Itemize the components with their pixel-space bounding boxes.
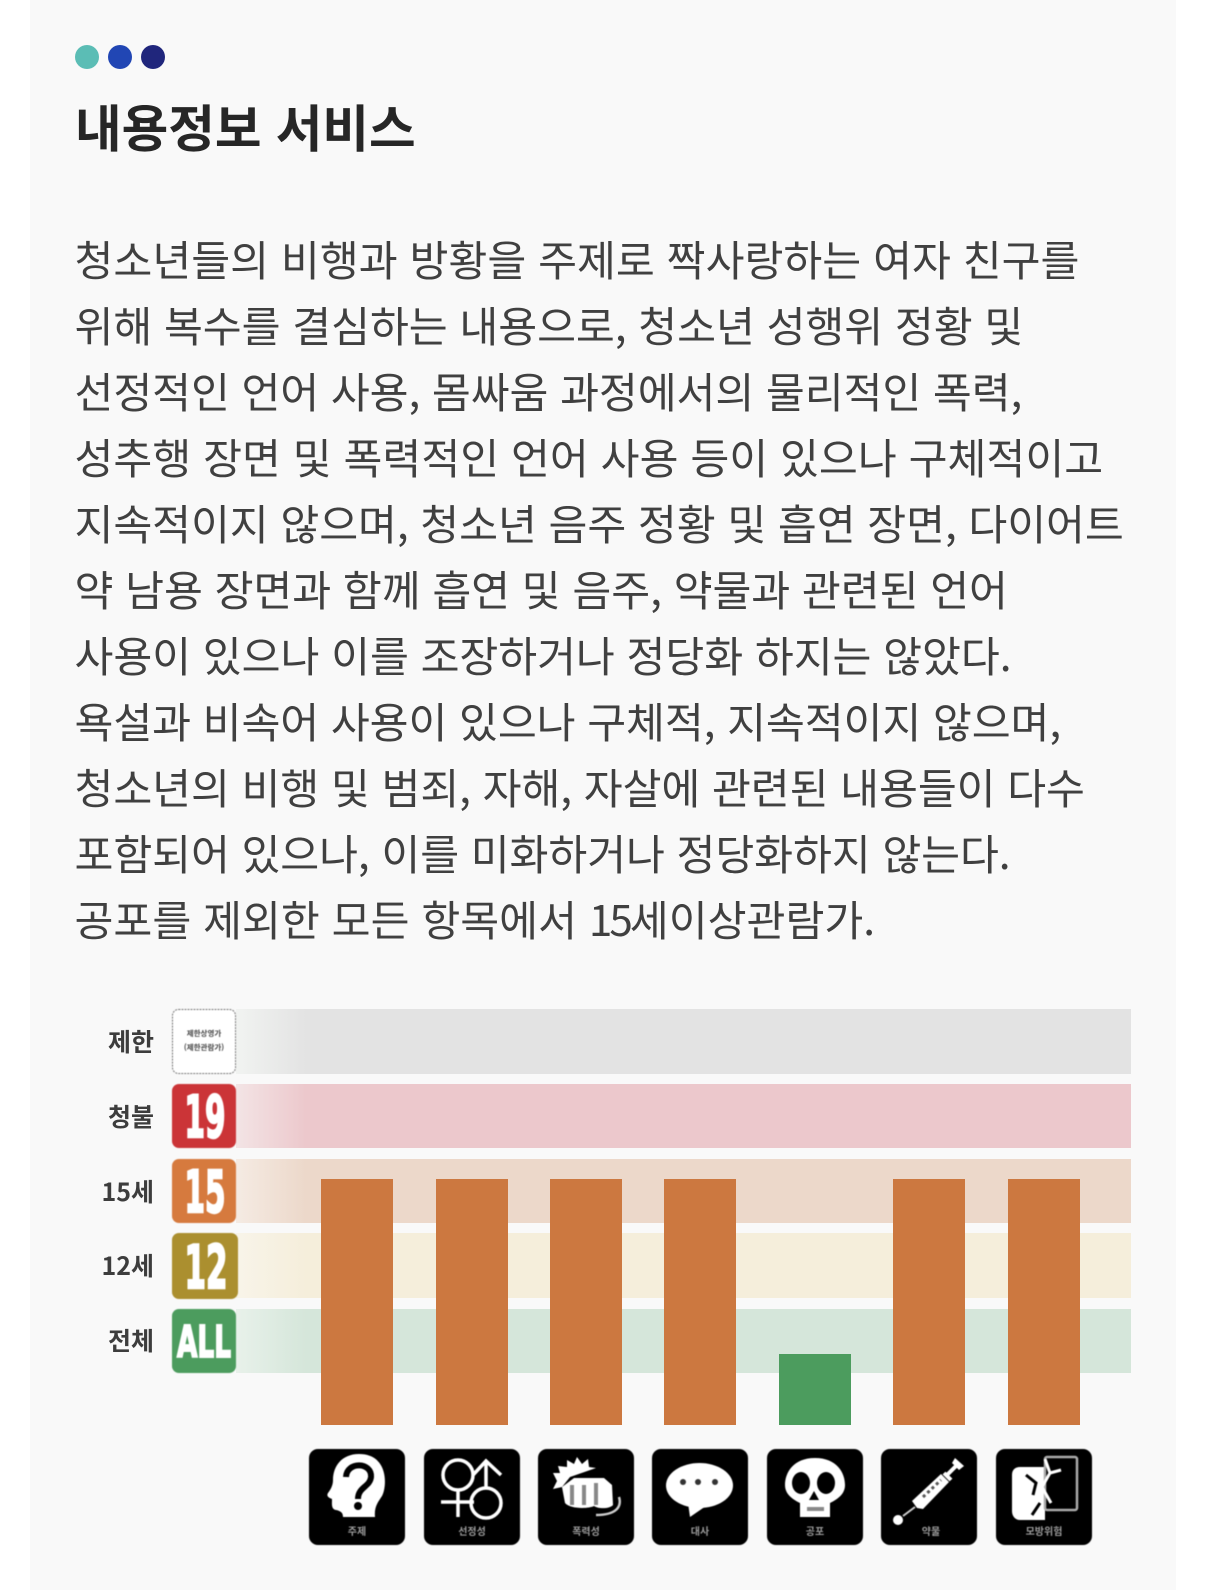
icon: imitation risk: 모방위험 [1026,1523,1062,1538]
row band: 19 [236,1084,1131,1148]
text block: content description: 약 남용 장면과 함께 흡연 및 음주, 약물과 관련된 언어 [74,558,1008,618]
row band: 15 [236,1159,1131,1223]
icon: sexuality: 선정성 [458,1523,486,1538]
row band: restricted [236,1009,1131,1074]
bar: sexuality [436,1179,508,1425]
icon: fear [766,1448,864,1546]
icon: sexuality [423,1448,521,1546]
icon: theme [308,1448,406,1546]
rating badge: restricted: 제한상영가 [187,1028,221,1039]
text block: content description: 위해 복수를 결심하는 내용으로, 청소년 성행위 정황 및 [74,294,1023,354]
bar: violence [550,1179,622,1425]
text block: content description: 욕설과 비속어 사용이 있으나 구체적, 지속적이지 않으며, [74,690,1061,750]
icon: theme: 주제 [348,1523,366,1538]
icon: drugs: 약물 [922,1523,940,1538]
icon: imitation risk [995,1448,1093,1546]
bar: dialogue [664,1179,736,1425]
rating badge: restricted [171,1008,237,1075]
icon: dialogue [651,1448,749,1546]
text block: content description: 사용이 있으나 이를 조장하거나 정당화 하지는 않았다. [74,624,1011,684]
icon: fear: 공포 [806,1523,824,1538]
bar: fear [779,1354,851,1425]
bar: drugs [893,1179,965,1425]
label: 12: 12세 [101,1247,154,1283]
text block: content description: 청소년들의 비행과 방황을 주제로 짝사랑하는 여자 친구를 [74,228,1079,288]
text block: content description: 성추행 장면 및 폭력적인 언어 사용 등이 있으나 구체적이고 [74,426,1103,486]
decorative three dots [75,45,165,69]
label: all: 전체 [108,1322,154,1358]
text block: content description: 공포를 제외한 모든 항목에서 15세이상관람가. [74,888,875,948]
bar: imitation [1008,1179,1080,1425]
text block: content description: 선정적인 언어 사용, 몸싸움 과정에서의 물리적인 폭력, [74,360,1022,420]
text block: content description: 포함되어 있으나, 이를 미화하거나 정당화하지 않는다. [74,822,1011,882]
icon: violence: 폭력성 [572,1523,600,1538]
row band: 12 [236,1233,1131,1298]
icon: dialogue: 대사 [691,1523,709,1538]
label: 19: 청불 [108,1098,154,1134]
text block: content description: 지속적이지 않으며, 청소년 음주 정황 및 흡연 장면, 다이어트 [74,492,1124,552]
label: 15: 15세 [101,1173,154,1209]
text block: content description: 청소년의 비행 및 범죄, 자해, 자살에 관련된 내용들이 다수 [74,756,1085,816]
rating badge: restricted: (제한관람가) [184,1042,224,1053]
title: 내용정보 서비스 [75,88,416,162]
row band: all [236,1309,1131,1373]
chart: rating by category [101,1008,1131,1546]
text block: content description [74,228,1124,948]
icon: violence [537,1448,635,1546]
label: restricted: 제한 [108,1023,154,1059]
rating badge: all [171,1308,237,1374]
icon: drugs [880,1448,978,1546]
bar: theme [321,1179,393,1425]
